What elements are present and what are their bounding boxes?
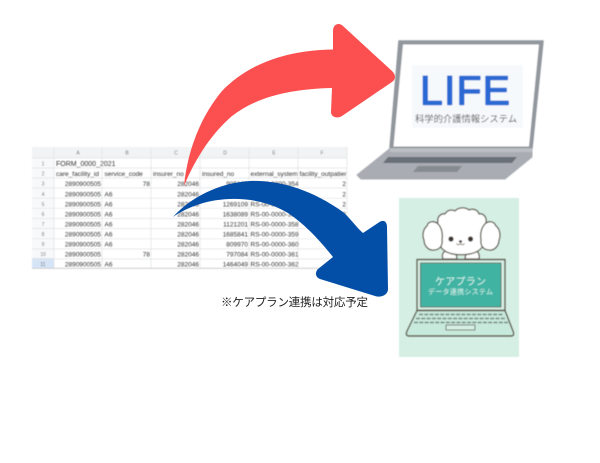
spreadsheet: 10 bbox=[40, 252, 46, 258]
spreadsheet: B bbox=[125, 150, 129, 156]
spreadsheet: 2890900505 bbox=[65, 192, 101, 198]
spreadsheet: 2890900505 bbox=[65, 262, 101, 268]
spreadsheet: 7 bbox=[42, 222, 45, 228]
spreadsheet: service_code bbox=[104, 171, 143, 178]
spreadsheet: RS-00-0000-359 bbox=[250, 232, 299, 238]
spreadsheet: 282046 bbox=[177, 192, 199, 198]
spreadsheet: 282046 bbox=[177, 212, 199, 218]
spreadsheet: 282046 bbox=[177, 222, 199, 228]
spreadsheet bbox=[32, 147, 347, 268]
spreadsheet: RS-00-0000-356 bbox=[250, 202, 299, 208]
spreadsheet: FORM_0000_2021 bbox=[56, 161, 116, 168]
spreadsheet: A6 bbox=[104, 212, 113, 218]
spreadsheet: insured_no bbox=[202, 171, 235, 178]
spreadsheet: RS-00-0000-357 bbox=[250, 212, 299, 218]
spreadsheet: 4 bbox=[42, 192, 45, 198]
spreadsheet: 8 bbox=[42, 232, 45, 238]
spreadsheet: RS-00-0000-358 bbox=[250, 222, 299, 228]
spreadsheet: external_system bbox=[250, 171, 298, 178]
spreadsheet: 809970 bbox=[226, 242, 248, 248]
spreadsheet: 1163200 bbox=[223, 192, 248, 198]
spreadsheet: 282046 bbox=[177, 252, 199, 258]
spreadsheet: 282046 bbox=[177, 242, 199, 248]
spreadsheet: 282046 bbox=[177, 232, 199, 238]
spreadsheet: D bbox=[223, 150, 227, 156]
spreadsheet: 282046 bbox=[177, 181, 199, 188]
spreadsheet: 5 bbox=[42, 202, 45, 208]
spreadsheet: 78 bbox=[143, 181, 150, 188]
logo subtitle: 科学的介護情報システム bbox=[415, 113, 517, 124]
spreadsheet: 2890900505 bbox=[65, 252, 101, 258]
spreadsheet: 6 bbox=[42, 212, 45, 218]
spreadsheet: A6 bbox=[104, 202, 113, 208]
spreadsheet: A6 bbox=[104, 222, 113, 228]
spreadsheet: facility_outpatier bbox=[300, 171, 347, 178]
laptop: LIFE bbox=[357, 41, 543, 179]
card: care plan system bbox=[399, 198, 519, 357]
spreadsheet: E bbox=[272, 150, 276, 156]
spreadsheet: RS-00-0000-354 bbox=[250, 181, 299, 188]
spreadsheet: 1269109 bbox=[223, 202, 248, 208]
spreadsheet: 2 bbox=[342, 181, 346, 188]
arrow: red to LIFE bbox=[184, 24, 395, 186]
spreadsheet: 2890900505 bbox=[65, 181, 101, 188]
spreadsheet: 1685841 bbox=[223, 232, 248, 238]
note text: ※ケアプラン連携は対応予定 bbox=[221, 295, 368, 309]
spreadsheet: 2890900505 bbox=[65, 242, 101, 248]
spreadsheet: A6 bbox=[104, 232, 113, 238]
spreadsheet: 78 bbox=[143, 252, 150, 258]
logo text: LIFE: LIFE bbox=[420, 68, 510, 114]
spreadsheet: 2 bbox=[342, 212, 346, 218]
spreadsheet: 2890900505 bbox=[65, 232, 101, 238]
spreadsheet: 2 bbox=[342, 202, 346, 208]
spreadsheet: 1638089 bbox=[223, 212, 248, 218]
spreadsheet: 2 bbox=[42, 172, 45, 178]
screen title: ケアプラン bbox=[435, 276, 486, 288]
spreadsheet: RS-00-0000-361 bbox=[250, 252, 299, 258]
spreadsheet: 1 bbox=[42, 162, 45, 168]
spreadsheet: 2 bbox=[342, 192, 346, 198]
spreadsheet: 9 bbox=[42, 242, 45, 248]
spreadsheet: F bbox=[320, 150, 324, 156]
spreadsheet: RS-00-0000-362 bbox=[250, 262, 299, 268]
spreadsheet: 2890900505 bbox=[65, 222, 101, 228]
spreadsheet: insurer_no bbox=[153, 171, 184, 178]
spreadsheet: RS-00-0000-360 bbox=[250, 242, 299, 248]
spreadsheet: 282046 bbox=[177, 202, 199, 208]
spreadsheet: care_facility_id bbox=[56, 171, 99, 178]
arrow: blue to care plan bbox=[173, 181, 388, 297]
icon: dog bbox=[423, 208, 500, 259]
spreadsheet: 282046 bbox=[177, 262, 199, 268]
spreadsheet: A bbox=[76, 150, 80, 156]
spreadsheet: C bbox=[174, 150, 178, 156]
screen subtitle: データ連携システム bbox=[428, 287, 493, 296]
spreadsheet: 2890900505 bbox=[65, 212, 101, 218]
spreadsheet: 11 bbox=[40, 262, 46, 268]
spreadsheet: A6 bbox=[104, 192, 113, 198]
spreadsheet: 1121201 bbox=[223, 222, 248, 228]
spreadsheet: 797084 bbox=[226, 252, 248, 258]
spreadsheet: RS-00-0000-355 bbox=[250, 192, 299, 198]
spreadsheet: A6 bbox=[104, 242, 113, 248]
spreadsheet: 1464049 bbox=[223, 262, 248, 268]
icon: laptop bbox=[406, 260, 514, 336]
spreadsheet: 905163 bbox=[226, 181, 248, 188]
spreadsheet: 3 bbox=[42, 182, 45, 188]
spreadsheet: 2890900505 bbox=[65, 202, 101, 208]
spreadsheet: A6 bbox=[104, 262, 113, 268]
